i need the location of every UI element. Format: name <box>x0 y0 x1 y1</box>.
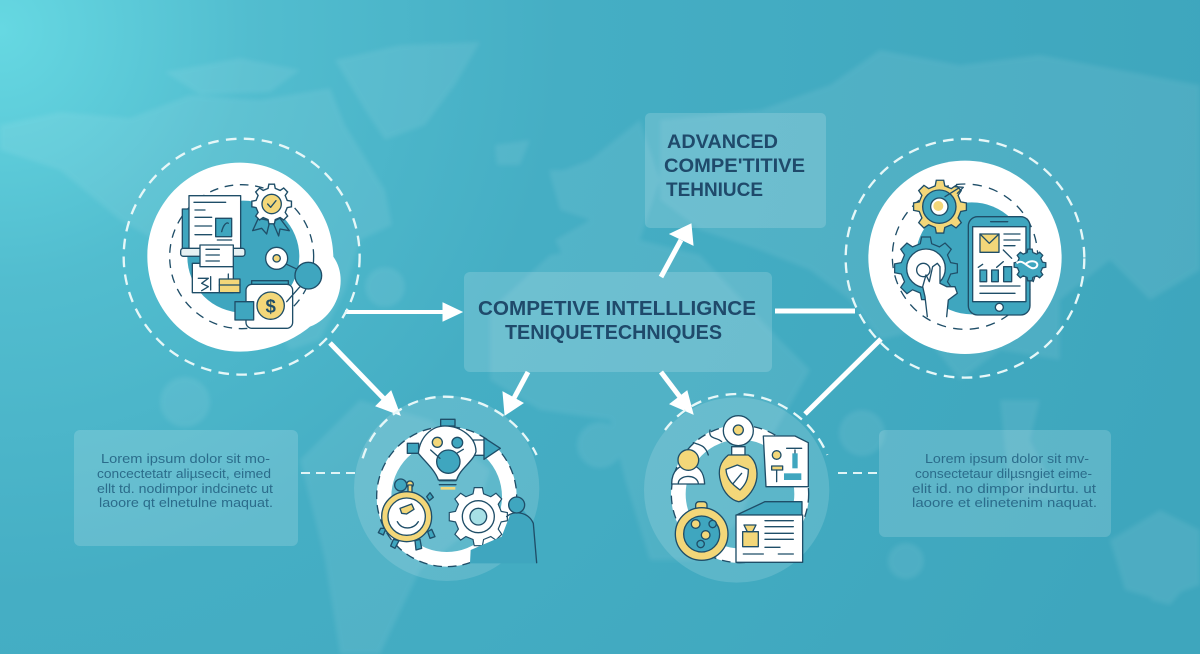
icon: award medal <box>252 184 291 236</box>
icon: dollar coin: $ <box>265 295 276 316</box>
icon: dollar coin <box>257 292 284 319</box>
panel: left text <box>74 430 298 546</box>
icon: teal gear with hand <box>895 237 957 317</box>
icon: person <box>672 450 705 484</box>
panel: right text: elit id. no dimpor indurtu. ut <box>912 481 1096 496</box>
dashed connectors <box>301 472 878 474</box>
icon: light bulb <box>407 419 500 488</box>
icon circle: documents and finance <box>124 139 360 375</box>
left body text: Lorem ipsum dolor sit mo- <box>101 451 270 466</box>
panel: advanced techniques <box>645 113 826 228</box>
panel: left text: ellt td. nodimpor indcinetc ut <box>97 481 273 496</box>
icon: white gear <box>449 488 507 546</box>
panel: right text: consectetaur dilµsngiet eime- <box>915 466 1092 481</box>
connector arrows <box>330 224 881 415</box>
panel: right text <box>879 430 1111 537</box>
panel: advanced techniques: COMPE'TITIVE <box>664 156 805 177</box>
right body text: Lorem ipsum dolor sit mv- <box>925 451 1089 466</box>
icon circle: idea and stopwatch <box>354 396 539 581</box>
panel: central topic: TENIQUETECHNIQUES <box>505 322 722 344</box>
icon: person <box>470 497 537 563</box>
icon: tool sheet <box>763 436 808 487</box>
icon: petri dish clock <box>675 502 728 560</box>
panel: right text: laoore et elinetenim naquat. <box>912 495 1097 510</box>
icon: stopwatch <box>378 479 435 550</box>
panel: advanced techniques: TEHNIUCE <box>666 180 763 201</box>
icon circle: security and documents <box>644 394 829 583</box>
icon: smartphone <box>968 217 1030 315</box>
central heading: COMPETIVE INTELLLIGNCE <box>478 298 756 320</box>
icon: yellow gear <box>914 180 966 233</box>
icon circle: gears and smartphone <box>846 139 1084 378</box>
panel: left text: concectetatr aliµsecit, eimed <box>97 466 271 481</box>
icon: shield <box>719 416 757 502</box>
panel: left text: laoore qt elnetulne maquat. <box>99 495 273 510</box>
panel: central topic <box>464 272 772 372</box>
icon: folder document <box>736 502 803 562</box>
advanced heading: ADVANCED <box>667 132 778 153</box>
